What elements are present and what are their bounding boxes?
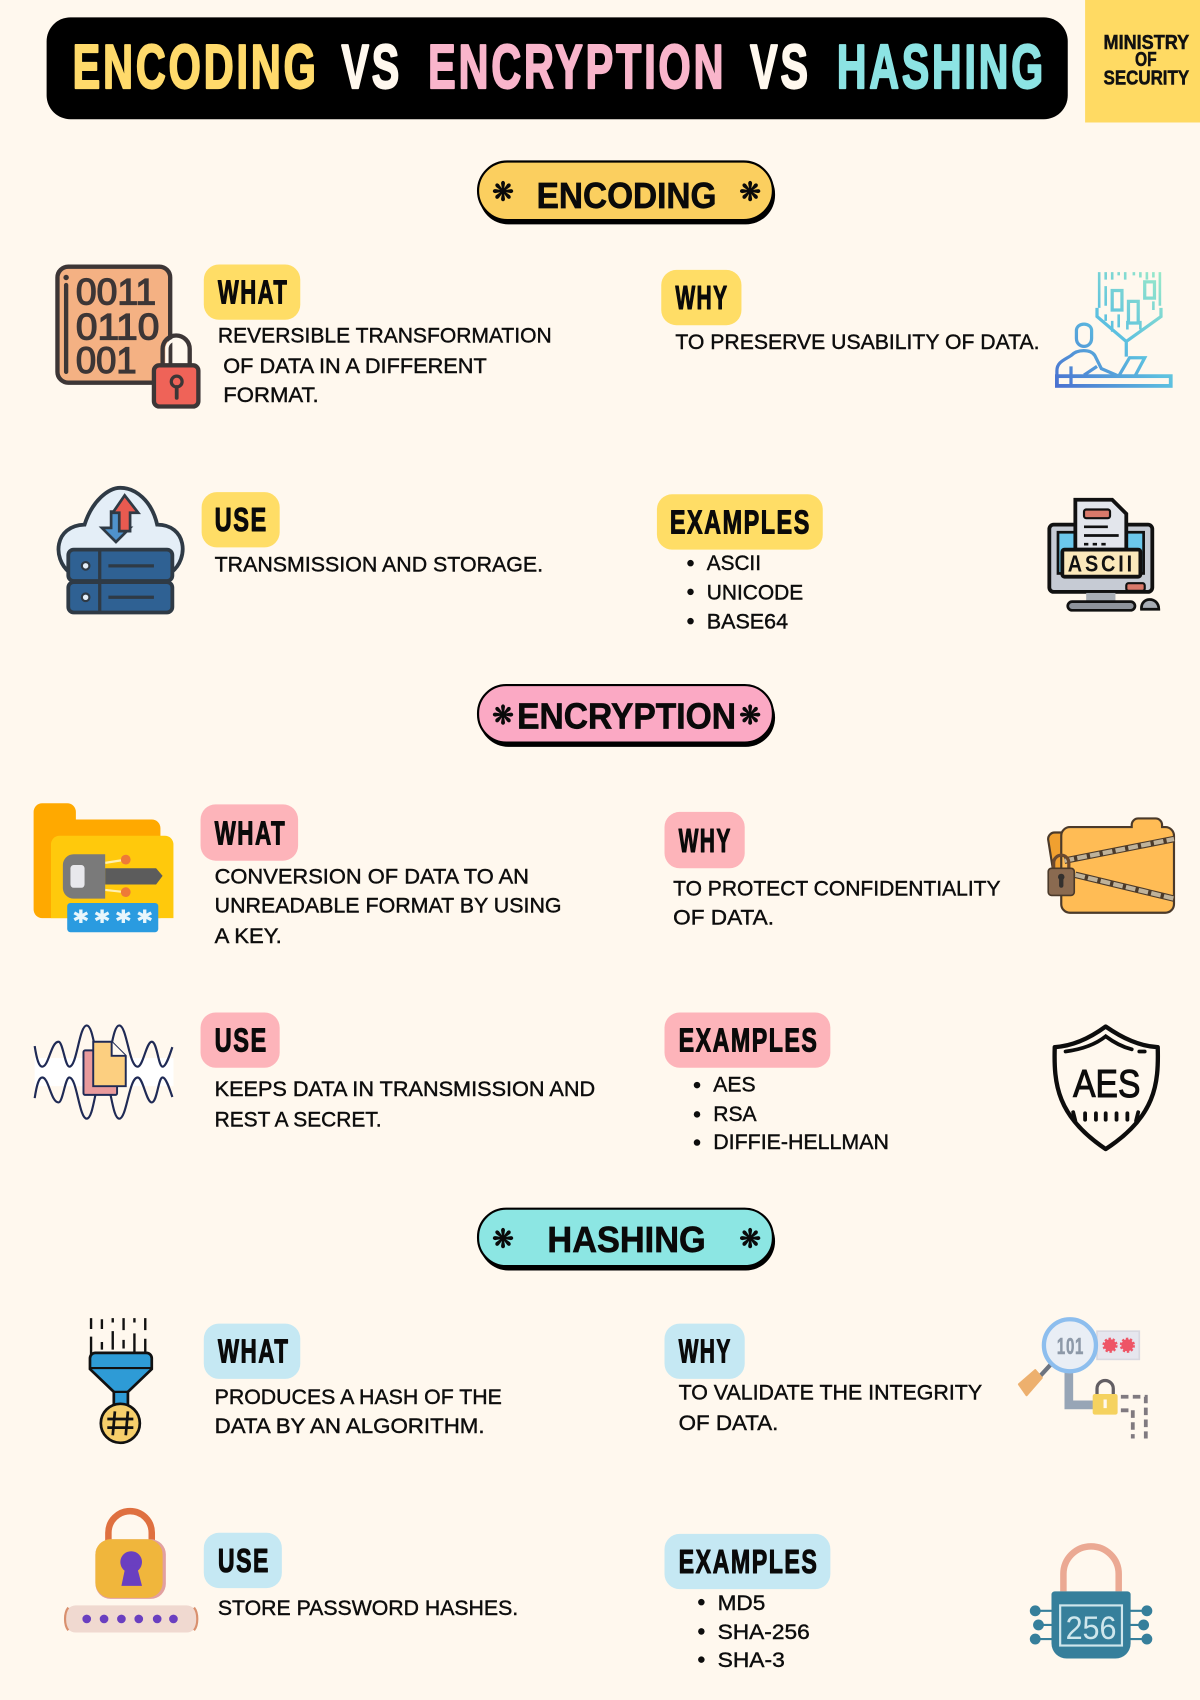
text: encryption what: A KEY.: [215, 923, 282, 948]
list: encoding examples: UNICODE: [707, 579, 803, 604]
label: examples: EXAMPLES: [679, 1022, 818, 1059]
list: encryption examples: DIFFIE-HELLMAN: [713, 1129, 889, 1154]
list: encoding examples: BASE64: [707, 609, 788, 634]
list: encryption examples: AES: [713, 1072, 756, 1097]
label: what: [204, 264, 300, 320]
text: hashing what: DATA BY AN ALGORITHM.: [215, 1413, 485, 1438]
list: encryption examples: RSA: [713, 1101, 757, 1126]
icon: chained folder with padlock: [1048, 818, 1174, 913]
title banner: VS: [750, 33, 811, 102]
heading: encryption: ❋: [739, 701, 761, 731]
label: what: WHAT: [218, 275, 288, 312]
label: why: WHY: [679, 1334, 732, 1371]
label: what: [201, 804, 298, 861]
label: use: USE: [218, 1543, 270, 1580]
text: encryption why: [673, 875, 1001, 930]
icon: folder with key and password: ****: [74, 906, 152, 937]
icon: padlock and password field: [65, 1511, 197, 1633]
text: hashing what: [215, 1384, 502, 1438]
panel: encoding what: [57, 264, 552, 407]
list: encryption examples: [694, 1072, 889, 1154]
title banner: VS: [341, 33, 402, 102]
panel: hashing examples: [664, 1534, 1152, 1672]
text: encoding what: REVERSIBLE TRANSFORMATION: [218, 323, 552, 348]
text: encryption what: UNREADABLE FORMAT BY USING: [215, 893, 562, 918]
text: encoding what: FORMAT.: [223, 382, 319, 407]
logo: ministry of security: [1085, 0, 1200, 122]
list: hashing examples: [698, 1590, 810, 1672]
label: examples: [664, 1012, 830, 1068]
label: use: USE: [215, 502, 268, 539]
heading: encryption: ❋: [492, 701, 514, 731]
icon: funnel producing hash: [90, 1318, 152, 1443]
list: encoding examples: [687, 550, 803, 634]
text: encryption use: REST A SECRET.: [215, 1106, 382, 1131]
label: why: [664, 1324, 745, 1379]
icon: folder with key and password: [34, 803, 173, 937]
text: encoding why: TO PRESERVE USABILITY OF DATA.: [675, 329, 1040, 354]
text: hashing why: OF DATA.: [679, 1410, 778, 1435]
icon: computer with ascii file: ASCII: [1068, 550, 1135, 576]
icon: magnifier inspecting data and lock: [1019, 1319, 1146, 1438]
heading: encoding: ❋: [492, 178, 514, 208]
panel: encoding why: [661, 270, 1171, 386]
panel: encryption use: [35, 1012, 595, 1131]
title banner: ENCRYPTION: [428, 33, 726, 102]
label: use: [204, 1533, 282, 1588]
icon: binary file with padlock: 0110: [76, 306, 159, 347]
text: hashing use: STORE PASSWORD HASHES.: [218, 1595, 518, 1620]
list: encoding examples: ASCII: [707, 550, 761, 575]
icon: cloud server transfer: [58, 488, 183, 612]
icon: binary file with padlock: [57, 267, 198, 407]
label: examples: [664, 1534, 830, 1589]
title banner: ENCODING: [73, 33, 319, 102]
label: what: [204, 1324, 300, 1379]
text: encryption use: [215, 1076, 595, 1131]
panel: encoding examples: [657, 494, 1159, 634]
heading: hashing: [478, 1209, 775, 1270]
list: hashing examples: SHA-3: [718, 1647, 785, 1672]
panel: hashing use: [65, 1511, 518, 1633]
icon: computer with ascii file: [1049, 500, 1159, 610]
icon: person at laptop with data funnel: [1057, 272, 1171, 386]
label: use: [201, 1012, 280, 1068]
text: hashing why: [679, 1379, 982, 1435]
panel: encryption examples: [664, 1012, 1158, 1154]
heading: encryption: ENCRYPTION: [517, 696, 736, 736]
label: what: WHAT: [215, 815, 286, 852]
label: examples: EXAMPLES: [670, 504, 811, 541]
heading: encoding: ENCODING: [537, 176, 717, 216]
panel: encryption why: [664, 812, 1174, 930]
label: why: WHY: [679, 823, 732, 860]
heading: hashing: HASHING: [547, 1220, 706, 1260]
label: why: [664, 812, 745, 868]
panel: encryption what: [34, 803, 562, 948]
text: encoding what: OF DATA IN A DIFFERENT: [223, 353, 487, 378]
text: encryption what: [215, 863, 562, 948]
heading: hashing: ❋: [739, 1225, 761, 1255]
panel: encoding use: [58, 488, 543, 612]
heading: hashing: ❋: [492, 1225, 514, 1255]
label: examples: EXAMPLES: [679, 1544, 818, 1581]
text: encryption why: OF DATA.: [673, 905, 774, 930]
icon: binary file with padlock: 001: [76, 340, 137, 381]
icon: 256-bit chip padlock: [1030, 1546, 1152, 1659]
text: encryption use: KEEPS DATA IN TRANSMISSION AND: [215, 1076, 595, 1101]
label: use: [202, 492, 280, 547]
icon: 256-bit chip padlock: 256: [1066, 1610, 1117, 1646]
logo: ministry of security: MINISTRY: [1104, 31, 1189, 54]
label: why: WHY: [675, 280, 728, 317]
text: hashing why: TO VALIDATE THE INTEGRITY: [679, 1379, 982, 1404]
icon: aes shield: [1055, 1027, 1158, 1149]
logo: ministry of security: OF: [1135, 48, 1157, 71]
heading: encoding: [478, 162, 775, 224]
title banner: HASHING: [837, 33, 1046, 102]
icon: signal waves with documents: [35, 1025, 173, 1119]
list: hashing examples: MD5: [718, 1590, 765, 1615]
label: examples: [657, 494, 823, 550]
icon: aes shield: AES: [1073, 1063, 1140, 1106]
label: use: USE: [215, 1022, 268, 1059]
text: encoding what: [218, 323, 552, 407]
label: why: [661, 270, 741, 325]
icon: magnifier inspecting data and lock: 101: [1057, 1333, 1084, 1359]
heading: encryption: [478, 685, 775, 747]
text: encoding use: TRANSMISSION AND STORAGE.: [215, 551, 543, 576]
panel: hashing why: [664, 1319, 1146, 1438]
text: hashing what: PRODUCES A HASH OF THE: [215, 1384, 502, 1409]
text: encryption why: TO PROTECT CONFIDENTIALITY: [673, 875, 1001, 900]
icon: binary file with padlock: 0011: [76, 272, 156, 313]
title banner: [47, 17, 1068, 119]
list: hashing examples: SHA-256: [718, 1619, 810, 1644]
panel: hashing what: [90, 1318, 502, 1443]
heading: encoding: ❋: [739, 178, 761, 208]
label: what: WHAT: [218, 1334, 289, 1371]
text: encryption what: CONVERSION OF DATA TO AN: [215, 863, 529, 888]
